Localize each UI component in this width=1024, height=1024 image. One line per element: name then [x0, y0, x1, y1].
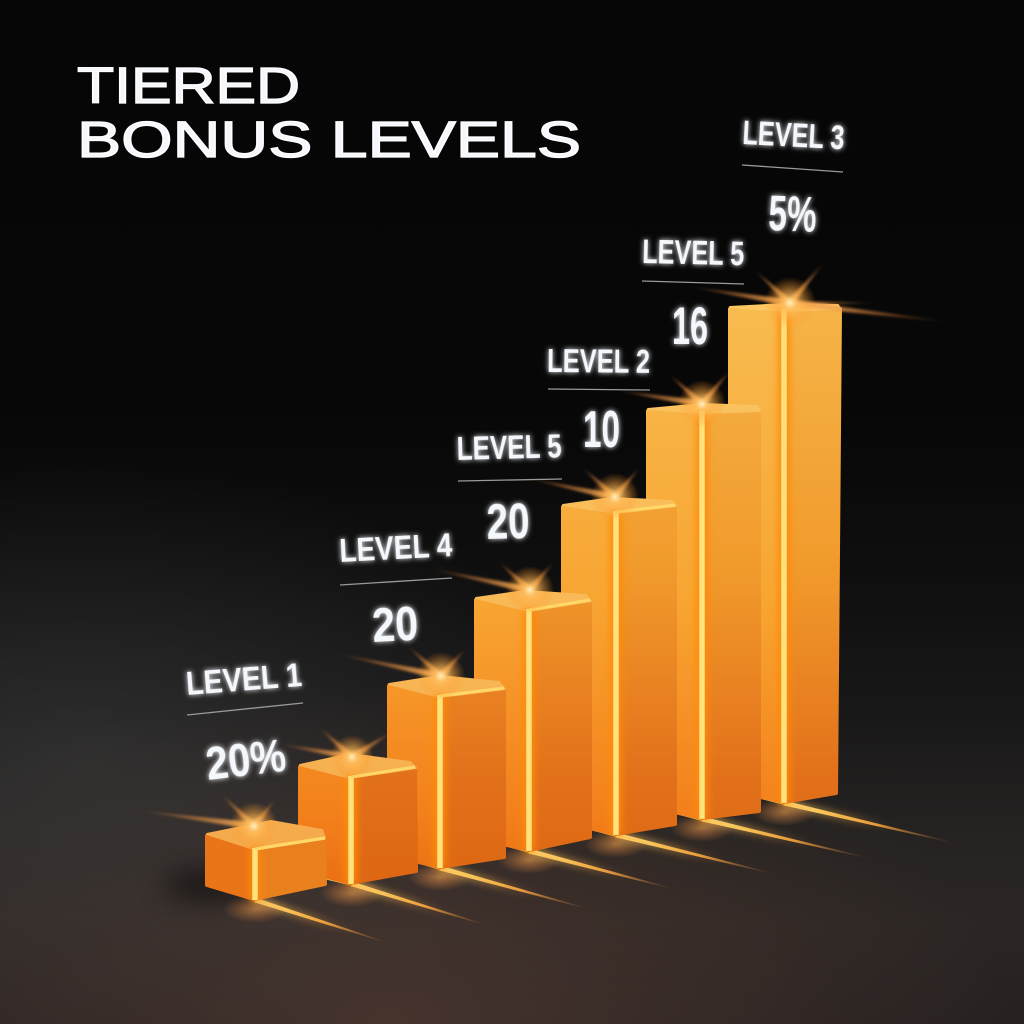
glint — [135, 790, 279, 829]
label: level 5 16 — [642, 233, 745, 356]
glint — [277, 724, 396, 760]
bar 6: level 5 — [613, 367, 760, 819]
title: TIERED — [77, 57, 300, 114]
bar 3: level 4 — [333, 643, 505, 868]
label: level 4 20: 20 — [371, 598, 420, 653]
label: level 4 20 — [338, 526, 454, 653]
bar 4: level 5 — [427, 558, 591, 851]
label: level 3 5% — [742, 114, 845, 243]
label: level 5 20 — [456, 427, 562, 550]
label: level 1 20%: 20% — [203, 729, 289, 790]
glint — [427, 558, 557, 593]
label: level 3 5%: LEVEL 3 — [742, 114, 845, 157]
label: level 5 16: 16 — [672, 297, 708, 356]
title — [77, 57, 581, 168]
label: level 3 5%: 5% — [768, 185, 818, 243]
glint — [686, 259, 954, 326]
floor shadow — [164, 871, 256, 899]
glint — [333, 643, 469, 679]
floor light rays — [223, 797, 952, 945]
label: level 5 20: 20 — [486, 493, 530, 550]
glint — [613, 367, 734, 407]
bar 1: level 1 block — [135, 790, 325, 900]
label: level 2 10 — [547, 342, 650, 459]
bar 7: level 3 — [686, 259, 954, 803]
bar 5: level 2 — [524, 464, 676, 835]
label: level 2 10: LEVEL 2 — [547, 342, 650, 380]
label: level 5 20: LEVEL 5 — [456, 427, 562, 467]
glint — [524, 464, 643, 500]
label: level 2 10: 10 — [583, 401, 620, 459]
label: level 4 20: LEVEL 4 — [338, 526, 454, 569]
title: BONUS LEVELS — [77, 111, 581, 168]
label: level 1 20% — [185, 656, 303, 790]
label: level 1 20%: LEVEL 1 — [185, 656, 303, 702]
label: level 5 16: LEVEL 5 — [642, 233, 745, 273]
bar 2: level 2 block — [277, 724, 416, 884]
